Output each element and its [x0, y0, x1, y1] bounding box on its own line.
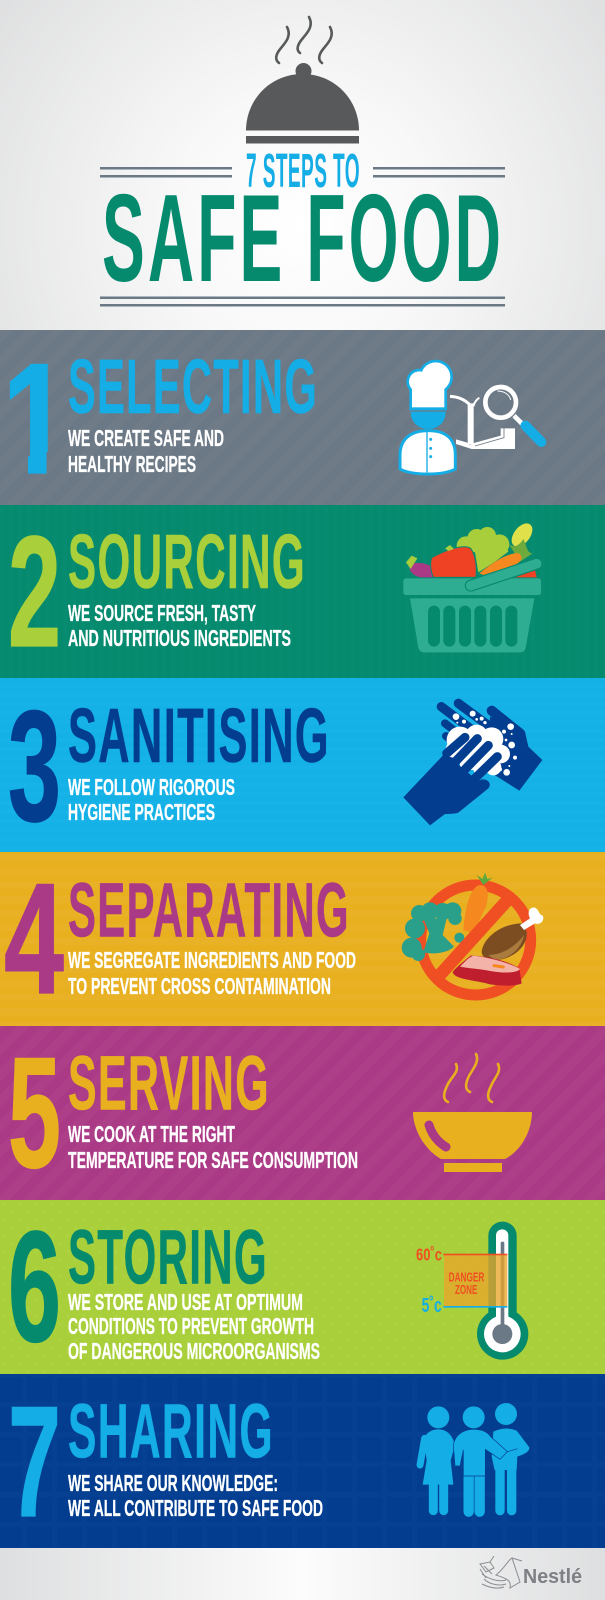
text: sanitising description: HYGIENE PRACTICES [68, 799, 215, 825]
text: sourcing description: AND NUTRITIOUS INGREDIENTS [68, 625, 291, 651]
text: separating description: TO PREVENT CROSS CONTAMINATION [68, 973, 331, 999]
text: storing description: OF DANGEROUS MICROORGANISMS [68, 1338, 320, 1364]
text: 7 STEPS TO [246, 145, 360, 198]
heading: sanitising: SANITISING [68, 693, 330, 779]
icon: thermometer danger zone [416, 1222, 528, 1360]
icon: steaming bowl [413, 1054, 532, 1172]
text: separating description: WE SEGREGATE INGREDIENTS AND FOOD [68, 947, 356, 973]
icon: thermometer danger zone: DANGER [449, 1270, 485, 1285]
text: selecting description: HEALTHY RECIPES [68, 451, 196, 477]
icon: steaming cloche [246, 17, 359, 144]
step number 7: 7 [8, 1374, 61, 1550]
step number 6: 6 [8, 1199, 61, 1375]
icon: thermometer danger zone: 5˚c [422, 1294, 442, 1317]
step number 4: 4 [4, 851, 64, 1027]
step number 2: 2 [8, 504, 61, 680]
logo: Nestlé [480, 1556, 582, 1588]
text: selecting description: WE CREATE SAFE AND [68, 425, 224, 451]
text: sharing description: WE SHARE OUR KNOWLEDGE: [68, 1470, 278, 1496]
text: sanitising description: WE FOLLOW RIGOROUS [68, 774, 235, 800]
step number 5: 5 [8, 1025, 61, 1201]
text: separating description [68, 947, 356, 999]
icon: no cross contamination [402, 872, 543, 995]
heading: selecting: SELECTING [68, 344, 318, 430]
heading: storing: STORING [68, 1214, 268, 1300]
header background [0, 0, 605, 330]
text: storing description: WE STORE AND USE AT OPTIMUM [68, 1289, 303, 1315]
text: storing description [68, 1289, 320, 1364]
heading: separating: SEPARATING [68, 868, 350, 954]
text: selecting description [68, 425, 224, 477]
icon: vegetable basket [403, 520, 541, 652]
text: sharing description: WE ALL CONTRIBUTE TO SAFE FOOD [68, 1495, 323, 1521]
panel: step 4 separating [0, 851, 605, 1027]
text: serving description: WE COOK AT THE RIGHT [68, 1121, 235, 1147]
text: serving description: TEMPERATURE FOR SAFE CONSUMPTION [68, 1147, 358, 1173]
step number 1: 1 [2, 331, 70, 507]
panel: step 7 sharing [0, 1374, 605, 1550]
panel: step 1 selecting [0, 330, 605, 507]
text: sourcing description: WE SOURCE FRESH, TASTY [68, 600, 256, 626]
icon: thermometer danger zone: 60˚c [416, 1245, 442, 1265]
icon: chef with recipe book and magnifier [400, 360, 541, 474]
panel: step 6 storing [0, 1199, 605, 1375]
text: serving description [68, 1121, 358, 1173]
heading: serving: SERVING [68, 1040, 270, 1126]
text: sharing description [68, 1470, 323, 1521]
heading: sharing: SHARING [68, 1388, 274, 1474]
text: storing description: CONDITIONS TO PREVENT GROWTH [68, 1313, 314, 1339]
panel: step 3 sanitising [0, 678, 605, 854]
logo: Nestlé: Nestlé [523, 1566, 582, 1588]
footer background [0, 1548, 605, 1600]
panel: step 5 serving [0, 1025, 605, 1201]
decorative lines [100, 167, 505, 306]
icon: thermometer danger zone: ZONE [455, 1282, 478, 1297]
text: sanitising description [68, 774, 235, 825]
heading: sourcing: SOURCING [68, 519, 306, 605]
text: sourcing description [68, 600, 291, 651]
panel: step 2 sourcing [0, 504, 605, 680]
icon: three people [420, 1403, 529, 1512]
step number 3: 3 [8, 678, 61, 854]
icon: washing hands [403, 703, 542, 825]
